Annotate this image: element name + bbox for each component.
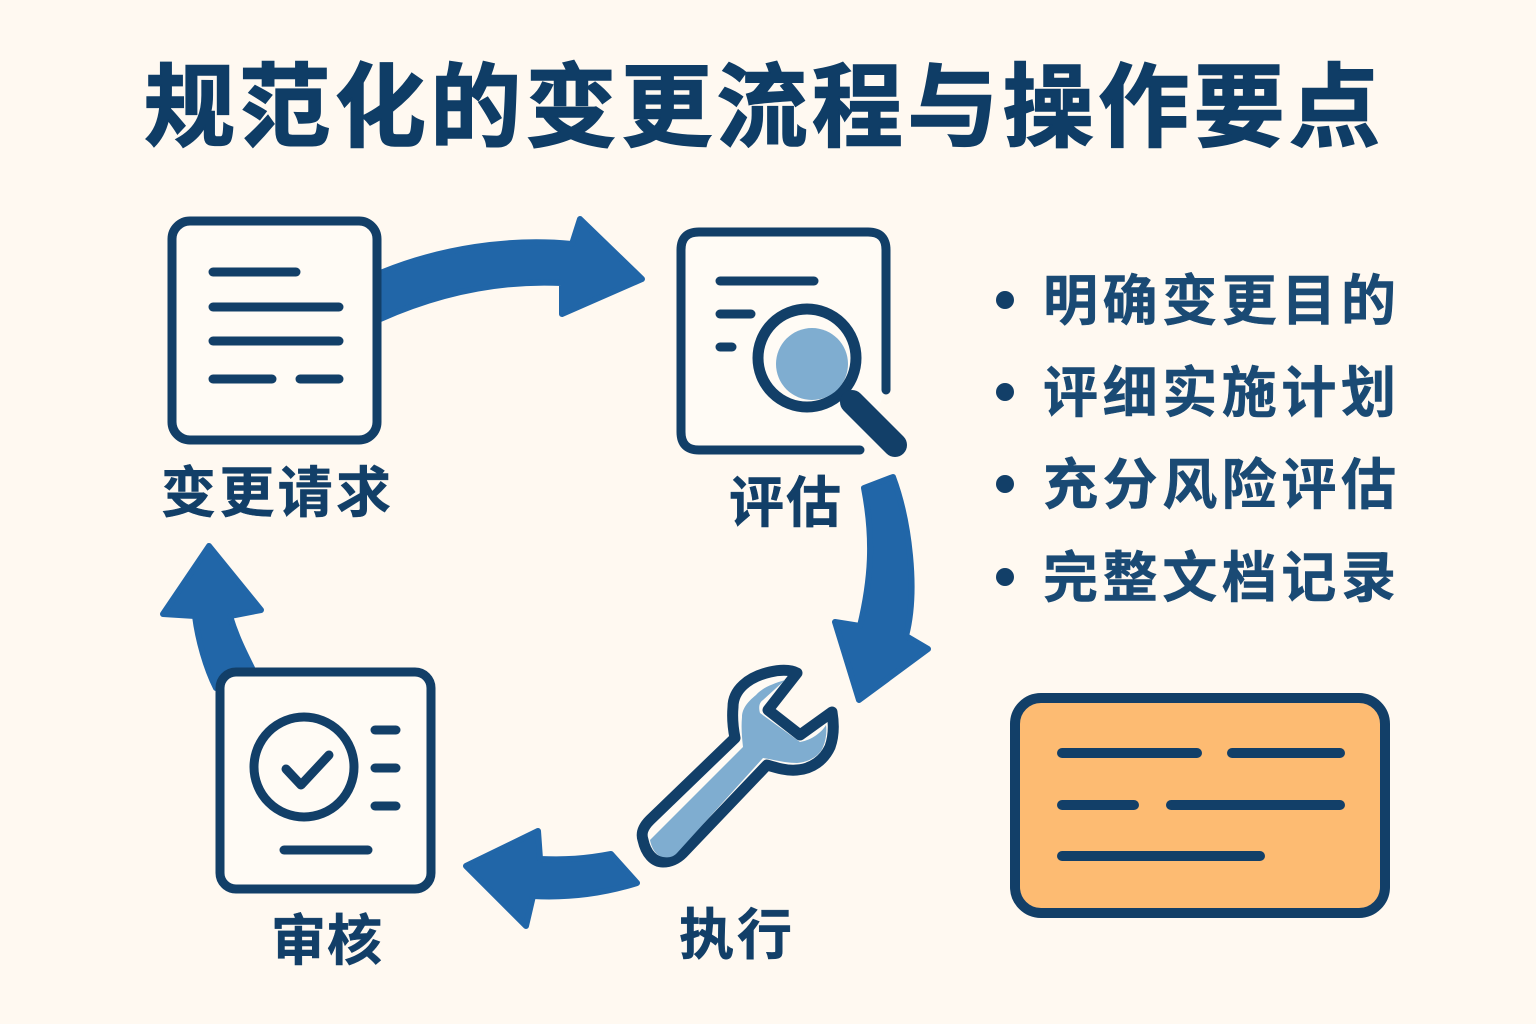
arrow: review to request (163, 546, 261, 688)
arrow: request to assessment (378, 219, 642, 320)
title: 规范化的变更流程与操作要点 (144, 58, 1380, 159)
key points list (996, 270, 1396, 609)
label: execution: 执行 (679, 904, 792, 966)
arrow: assessment to execution (835, 477, 928, 700)
arrow: execution to review (466, 831, 637, 926)
label: review: 审核 (271, 910, 382, 972)
orange note card (1015, 698, 1385, 913)
key points list: 完整文档记录 (1043, 547, 1396, 609)
icon: assessment document with magnifier (681, 232, 895, 450)
label: change request: 变更请求 (161, 462, 391, 524)
key points list: 明确变更目的 (1043, 270, 1396, 332)
key points list: 评细实施计划 (1043, 362, 1396, 424)
label: assessment: 评估 (729, 472, 841, 534)
icon: request document (172, 221, 377, 440)
icon: wrench (642, 670, 833, 862)
icon: review document with check (220, 672, 431, 889)
key points list: 充分风险评估 (1043, 454, 1396, 516)
